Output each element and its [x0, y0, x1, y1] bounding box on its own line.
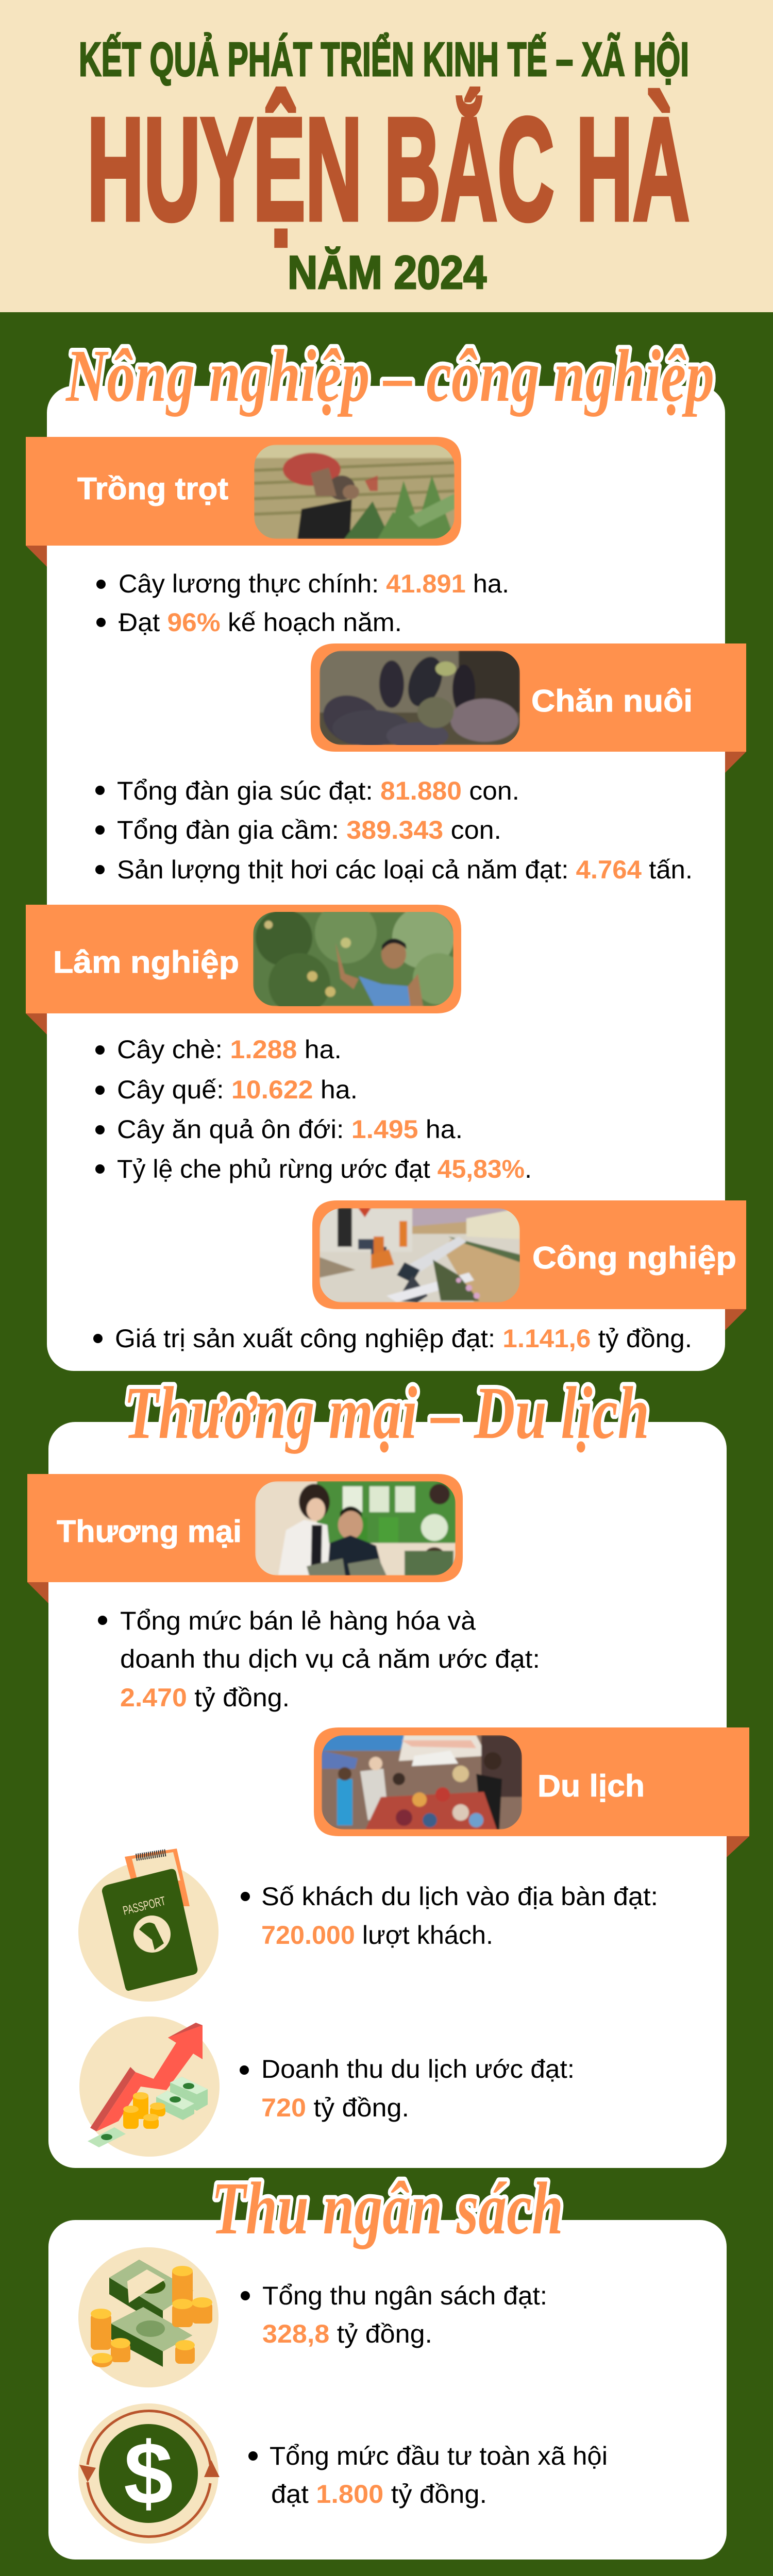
label: Lâm nghiệp [53, 945, 239, 979]
ribbon: industry [312, 1200, 746, 1330]
icon: money stacks [78, 2247, 219, 2387]
bullets: tourists [241, 1882, 658, 1950]
bullets: forestry [95, 1035, 532, 1183]
bullets: tourism revenue [240, 2055, 575, 2122]
bullets: tourism revenue: Doanh thu du lịch ước đạt: [261, 2055, 575, 2083]
label: Công nghiệp [532, 1241, 736, 1275]
ribbon: livestock [311, 643, 746, 773]
bullets: budget revenue [241, 2281, 547, 2348]
bullets: budget revenue: Tổng thu ngân sách đạt: [262, 2281, 547, 2310]
ribbon: tourism [314, 1727, 749, 1857]
header band [0, 0, 773, 312]
bullets: crop farming: Cây lương thực chính: 41.891 ha. [119, 569, 509, 598]
bullets: livestock [95, 776, 693, 884]
bullets: trade: 2.470 tỷ đồng. [120, 1683, 290, 1712]
icon: passport [78, 1849, 219, 2002]
industry photo [320, 1208, 520, 1302]
bullets: total investment [248, 2442, 608, 2509]
icon: passport: PASSPORT [122, 1894, 167, 1918]
title line 3: NĂM 2024 [288, 247, 486, 299]
bullets: crop farming: Đạt 96% kế hoạch năm. [119, 608, 402, 637]
tourism photo [322, 1735, 522, 1829]
bullets: crop farming [96, 569, 509, 637]
trade photo [255, 1481, 456, 1575]
ribbon: crop farming [26, 437, 461, 567]
ribbon: trade [27, 1474, 463, 1603]
bullets: livestock: Tổng đàn gia cầm: 389.343 con. [117, 816, 501, 844]
icon: revenue growth [79, 2016, 220, 2157]
bullets: tourists: Số khách du lịch vào địa bàn đạt: [261, 1882, 658, 1911]
bullets: total investment: Tổng mức đầu tư toàn xã hội [270, 2442, 608, 2470]
icon: dollar cycle: $ [124, 2424, 173, 2523]
panel: agriculture and industry [26, 335, 746, 1371]
bullets: total investment: đạt 1.800 tỷ đồng. [271, 2480, 487, 2509]
bullets: livestock: Sản lượng thịt hơi các loại cả năm đạt: 4.764 tấn. [117, 855, 693, 884]
crop photo [254, 445, 455, 539]
icon: dollar cycle [78, 2403, 220, 2544]
bullets: forestry: Tỷ lệ che phủ rừng ước đạt 45,83%. [117, 1155, 532, 1183]
label: Du lịch [537, 1769, 645, 1803]
bullets: forestry: Cây chè: 1.288 ha. [117, 1035, 342, 1064]
bullets: forestry: Cây ăn quả ôn đới: 1.495 ha. [117, 1115, 463, 1144]
livestock photo [320, 651, 520, 745]
bullets: forestry: Cây quế: 10.622 ha. [117, 1075, 358, 1104]
bullets: industry: Giá trị sản xuất công nghiệp đạt: 1.141,6 tỷ đồng. [115, 1324, 692, 1353]
panel: trade and tourism [27, 1372, 749, 2168]
bullets: livestock: Tổng đàn gia súc đạt: 81.880 con. [117, 776, 519, 805]
bullets: budget revenue: 328,8 tỷ đồng. [262, 2319, 432, 2348]
label: Chăn nuôi [531, 684, 693, 718]
label: Trồng trọt [77, 471, 228, 506]
heading: budget revenue: Thu ngân sách [211, 2167, 563, 2250]
forestry photo [253, 912, 453, 1006]
bullets: tourism revenue: 720 tỷ đồng. [261, 2093, 409, 2122]
label: Thương mại [57, 1514, 242, 1549]
bullets: tourists: 720.000 lượt khách. [261, 1921, 493, 1950]
bullets: trade: doanh thu dịch vụ cả năm ước đạt: [120, 1645, 540, 1673]
ribbon: forestry [26, 902, 464, 1035]
panel: budget revenue [48, 2167, 727, 2560]
bullets: trade: Tổng mức bán lẻ hàng hóa và [120, 1606, 476, 1635]
bullets: trade [98, 1606, 540, 1712]
